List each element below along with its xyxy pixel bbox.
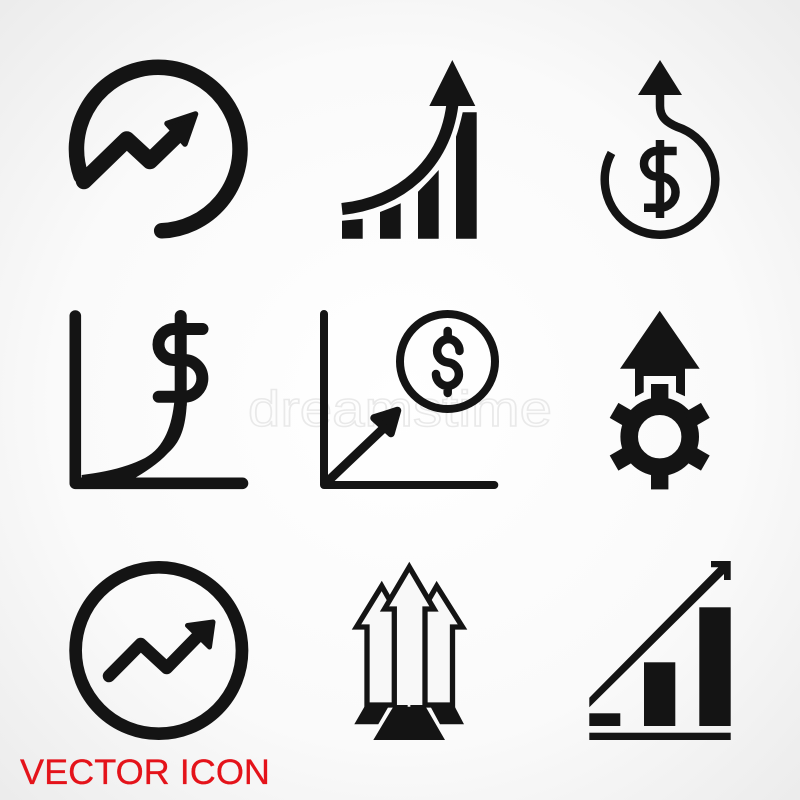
- icon: bar chart with straight arrow: [589, 561, 731, 740]
- icon: dollar in circle with arrow out: [605, 60, 715, 235]
- icon: partial circle with zigzag arrow: [76, 67, 240, 231]
- icon: axes with arrow toward dollar coin: [324, 314, 495, 485]
- icon: axes with dollar growth curve: [75, 316, 242, 483]
- icon: three outlined up arrows: [354, 567, 464, 740]
- icon: rising bars with curved arrow: [342, 60, 477, 239]
- icon: full circle with zigzag arrow: [76, 567, 242, 734]
- caption: vector icon: VECTOR ICON: [20, 753, 270, 792]
- watermark: dreamstime: [248, 381, 552, 437]
- icon: gear with up arrow: [610, 311, 710, 489]
